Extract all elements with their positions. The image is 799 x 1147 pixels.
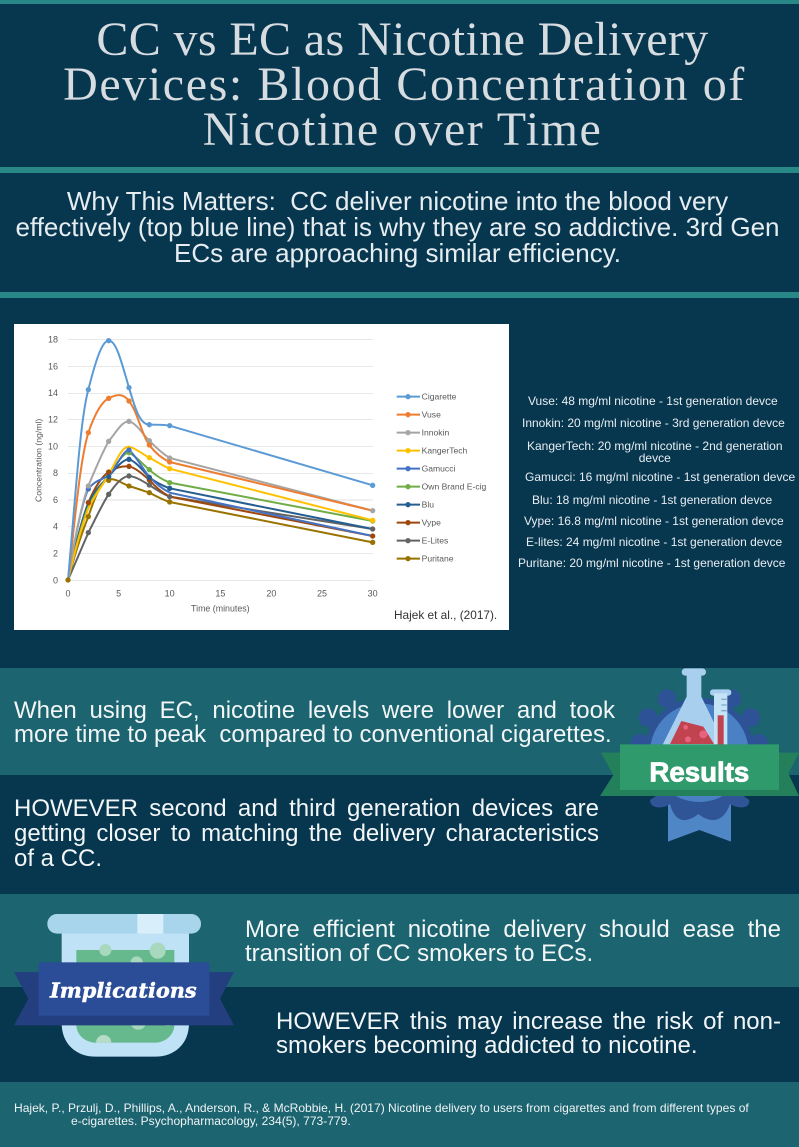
device notes (518, 394, 795, 570)
icon: implications beaker badge (14, 914, 234, 1057)
device notes: Innokin: 20 mg/ml nicotine - 3rd generation devce (522, 416, 785, 430)
chart legend: Cigarette (422, 391, 457, 401)
line chart: 8 (53, 468, 58, 478)
chart legend: Blu (422, 500, 434, 510)
implications text 1: transition of CC smokers to ECs. (245, 940, 593, 967)
references band (0, 1082, 799, 1147)
line chart: 0 (53, 575, 58, 585)
references (14, 1101, 749, 1128)
line chart: 14 (48, 388, 58, 398)
line chart: 4 (53, 522, 58, 532)
icon: results flask badge (600, 668, 799, 842)
results text 2: getting closer to matching the delivery characteristics (14, 820, 599, 847)
chart legend: Own Brand E-cig (422, 482, 487, 492)
title (63, 13, 746, 156)
device notes: E-lites: 24 mg/ml nicotine - 1st generation devce (526, 534, 782, 548)
line chart: 10 (48, 441, 58, 451)
line chart: 5 (116, 589, 121, 599)
title: CC vs EC as Nicotine Delivery (96, 13, 709, 66)
icon: implications beaker badge: Implications (49, 979, 197, 1003)
chart source: Hajek et al., (2017). (394, 608, 497, 622)
line chart panel (14, 324, 509, 630)
line chart: 15 (215, 589, 225, 599)
chart legend: Puritane (422, 554, 454, 564)
implications band 2 (0, 987, 799, 1082)
chart legend: KangerTech (422, 446, 468, 456)
line chart: 6 (53, 495, 58, 505)
results text 1 (14, 696, 615, 748)
results text 1: When using EC, nicotine levels were lower and took (14, 696, 615, 724)
icon: results flask badge: Results (649, 756, 749, 787)
chart legend: Vuse (422, 410, 441, 420)
why this matters text: effectively (top blue line) that is why they are so addictive. 3rd Gen (15, 212, 780, 242)
chart legend (397, 391, 487, 564)
device notes: Gamucci: 16 mg/ml nicotine - 1st generation devce (525, 470, 795, 484)
title: Devices: Blood Concentration of (63, 58, 746, 111)
references: e-cigarettes. Psychopharmacology, 234(5), 773-779. (71, 1114, 351, 1128)
implications text 2: smokers becoming addicted to nicotine. (276, 1032, 698, 1059)
results band 2 (0, 775, 799, 894)
line chart: 0 (65, 589, 71, 599)
line chart: 16 (48, 361, 58, 371)
chart legend: Vype (422, 518, 441, 528)
results text 2 (14, 794, 599, 872)
line chart: Concentration (ng/ml) (33, 419, 43, 502)
device notes: KangerTech: 20 mg/ml nicotine - 2nd generation (527, 438, 782, 452)
title: Nicotine over Time (203, 103, 602, 156)
references: Hajek, P., Przulj, D., Phillips, A., Anderson, R., & McRobbie, H. (2017) Nicotine delivery to users from cigarettes and from different types of (14, 1101, 749, 1115)
line chart: 10 (165, 589, 175, 599)
results text 2: HOWEVER second and third generation devices are (14, 794, 599, 822)
why this matters text: ECs are approaching similar efficiency. (174, 238, 621, 268)
line chart: 18 (48, 335, 58, 345)
results text 2: of a CC. (14, 845, 102, 872)
why this matters text: Why This Matters: CC deliver nicotine into the blood very (67, 186, 728, 216)
line chart: Time (minutes) (191, 604, 250, 614)
why this matters text (15, 186, 780, 268)
implications text 2: HOWEVER this may increase the risk of non- (276, 1008, 781, 1035)
device notes: Vuse: 48 mg/ml nicotine - 1st generation devce (528, 394, 778, 408)
line chart (33, 335, 497, 622)
top strip (0, 0, 799, 4)
line chart: 30 (368, 589, 378, 599)
implications text 1 (245, 916, 781, 967)
line chart: 25 (317, 589, 327, 599)
chart legend: Innokin (422, 428, 449, 438)
results text 1: more time to peak compared to conventional cigarettes. (14, 720, 612, 748)
chart legend: E-Lites (422, 536, 448, 546)
line chart: 20 (266, 589, 276, 599)
implications band 1 (0, 894, 799, 987)
device notes: Blu: 18 mg/ml nicotine - 1st generation devce (532, 492, 772, 506)
device notes: devce (639, 450, 671, 464)
results band 1 (0, 668, 799, 775)
device notes: Puritane: 20 mg/ml nicotine - 1st generation devce (518, 556, 785, 570)
device notes: Vype: 16.8 mg/ml nicotine - 1st generation devce (524, 514, 784, 528)
implications text 1: More efficient nicotine delivery should ease the (245, 916, 781, 943)
implications text 2 (276, 1008, 781, 1059)
chart legend: Gamucci (422, 464, 455, 474)
line chart: 2 (53, 548, 58, 558)
line chart: 12 (48, 415, 58, 425)
